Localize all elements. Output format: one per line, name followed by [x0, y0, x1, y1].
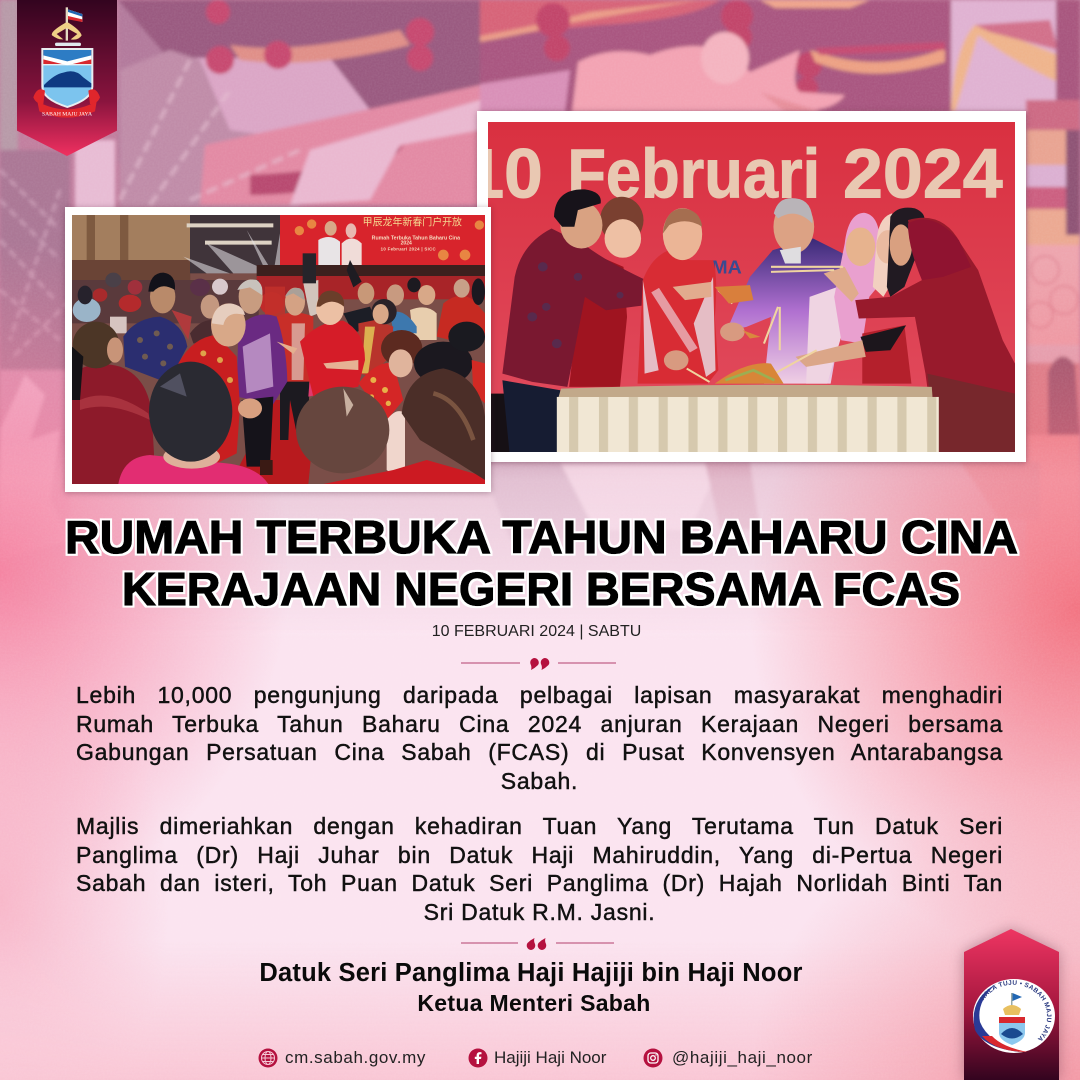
footer: website: cm.sabah.gov.my — [285, 1048, 426, 1067]
photo: guests mingling in the hall: Rumah Terbuka Tahun Baharu Cina — [372, 235, 460, 241]
title: KERAJAAN NEGERI BERSAMA FCAS — [122, 563, 960, 615]
paragraph: attendance — [76, 682, 1003, 794]
motto ribbon — [33, 89, 100, 118]
paragraph: guests of honour: Majlis dimeriahkan dengan kehadiran Tuan Yang Terutama Tun Datuk Seri — [76, 813, 1003, 839]
top right decor: lanterns, dragon, pillar — [480, 0, 1080, 112]
photo: yee sang toss on stage: MA — [711, 258, 742, 278]
icon: globe — [258, 1048, 278, 1068]
photo: guests mingling in the hall: 2024 — [401, 240, 412, 246]
photo: guests mingling in the hall: 10 Februari 2024 | SICC — [381, 247, 436, 252]
paragraph: attendance: Gabungan Persatuan Cina Sabah (FCAS) di Pusat Konvensyen Antarabangsa — [76, 739, 1003, 765]
photo: guests mingling in the hall — [65, 207, 491, 492]
icon: flag and crown — [52, 7, 82, 46]
footer: facebook: Hajiji Haji Noor — [494, 1048, 606, 1067]
title: RUMAH TERBUKA TAHUN BAHARU CINA — [65, 511, 1018, 563]
paragraph: guests of honour: Sri Datuk R.M. Jasni. — [424, 899, 655, 925]
paragraph: attendance: Sabah. — [501, 768, 578, 794]
photo: yee sang toss on stage — [477, 111, 1026, 462]
divider with quotation marks, top — [461, 658, 616, 670]
paragraph: attendance: Rumah Terbuka Tahun Baharu Cina 2024 anjuran Kerajaan Negeri bersama — [76, 711, 1003, 737]
crest banner top left — [17, 0, 117, 156]
under-photo faded scenery — [70, 462, 1026, 630]
footer: instagram: @hajiji_haji_noor — [672, 1048, 813, 1067]
paragraph: guests of honour: Panglima (Dr) Haji Juhar bin Datuk Haji Mahiruddin, Yang di-Pertua Negeri — [76, 842, 1003, 868]
signatory role: Ketua Menteri Sabah — [417, 990, 651, 1016]
ceiling and decor top left — [118, 0, 480, 112]
icon: state shield with Mount Kinabalu — [41, 48, 93, 108]
photo: yee sang toss on stage: Februari — [567, 136, 820, 213]
photo: guests mingling in the hall: 甲辰龙年新春门户开放 — [363, 215, 462, 228]
paragraph: guests of honour: Sabah dan isteri, Toh Puan Datuk Seri Panglima (Dr) Hajah Norlidah Binti Tan — [76, 870, 1003, 896]
photo: yee sang toss on stage: 2024 — [843, 136, 1003, 213]
paragraph: attendance: Lebih 10,000 pengunjung daripada pelbagai lapisan masyarakat menghadiri — [76, 682, 1003, 708]
emblem: Hala Tuju round logo: HALA TUJU • SABAH MAJU JAYA — [980, 980, 1052, 1041]
fade wash and pink edges — [0, 240, 1080, 1080]
icon: facebook — [468, 1048, 488, 1068]
divider with quotation marks, bottom — [461, 938, 614, 950]
right edge strip — [1026, 100, 1080, 130]
motto ribbon: SABAH MAJU JAYA — [42, 112, 92, 118]
title — [65, 511, 1020, 615]
signatory name: Datuk Seri Panglima Haji Hajiji bin Haji Noor — [259, 959, 803, 987]
left foliage strip — [0, 0, 18, 150]
emblem banner bottom right — [956, 924, 1066, 1080]
date line: 10 FEBRUARI 2024 | SABTU — [432, 623, 641, 640]
paragraph: guests of honour — [76, 813, 1003, 925]
icon: instagram — [644, 1048, 662, 1068]
